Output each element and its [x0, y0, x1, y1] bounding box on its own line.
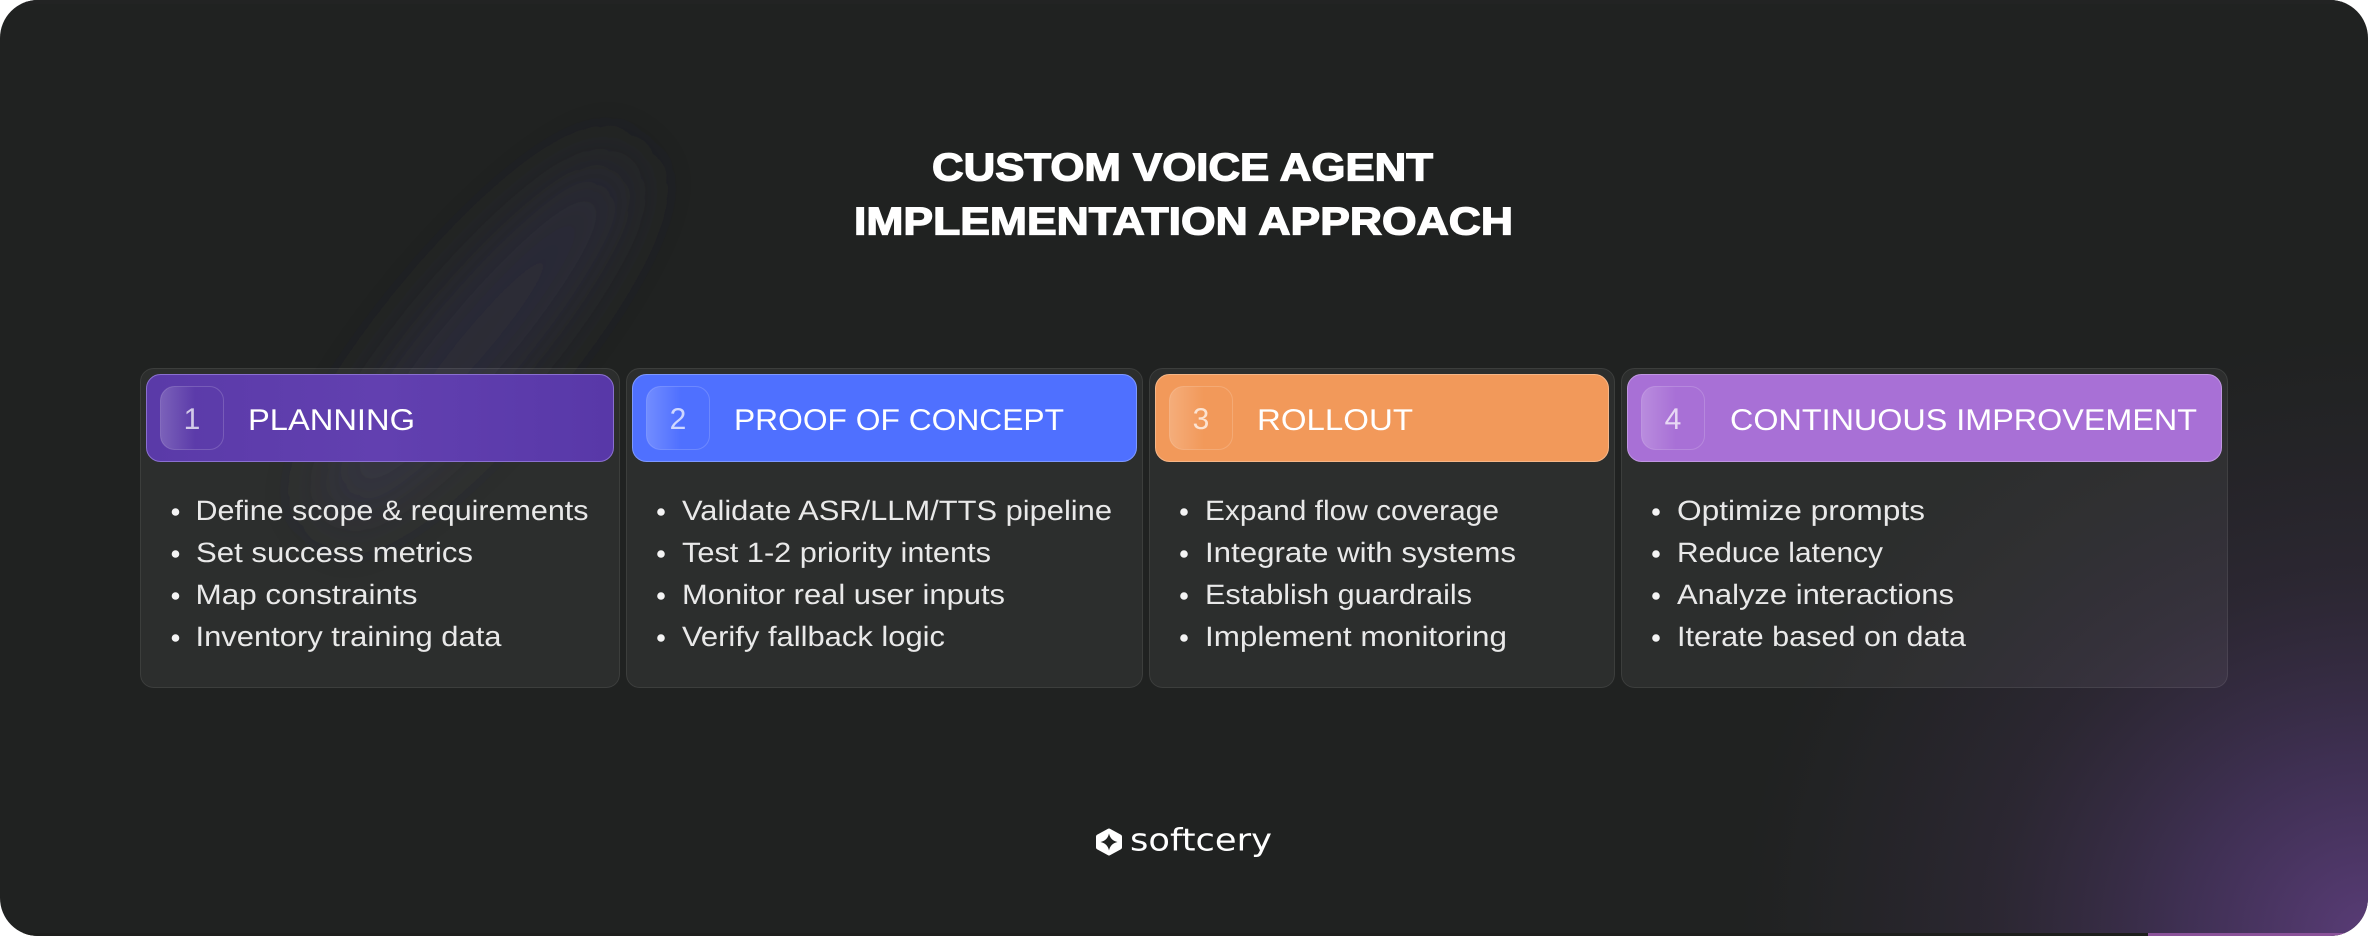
list: continuous improvement tasks: Analyze interactions: [1677, 579, 1954, 610]
header: planning: [146, 374, 614, 462]
list: proof of concept tasks: Validate ASR/LLM/TTS pipeline: [682, 495, 1112, 526]
list: continuous improvement tasks: Reduce latency: [1677, 537, 1883, 568]
heading: proof of concept: PROOF OF CONCEPT: [734, 404, 1064, 437]
list: proof of concept tasks: [657, 495, 1112, 652]
list: planning tasks: Inventory training data: [196, 621, 502, 652]
list: proof of concept tasks: Monitor real user inputs: [682, 579, 1005, 610]
panel: proof of concept: [626, 368, 1142, 688]
badge: number 2: [646, 386, 710, 450]
list: continuous improvement tasks: [1652, 495, 1966, 652]
title: CUSTOM VOICE AGENT: [932, 146, 1433, 190]
badge: number 3: 3: [1193, 403, 1209, 436]
heading: rollout: ROLLOUT: [1257, 404, 1413, 437]
list: continuous improvement tasks: Iterate based on data: [1677, 621, 1966, 652]
header: continuous improvement: [1628, 374, 2222, 462]
title: [854, 146, 1513, 244]
list: proof of concept tasks: Test 1-2 priority intents: [682, 537, 991, 568]
list: rollout tasks: Expand flow coverage: [1205, 495, 1499, 526]
badge: number 2: 2: [670, 403, 686, 436]
panel: continuous improvement: [1622, 368, 2228, 688]
panel: planning: [140, 368, 620, 688]
header: rollout: [1156, 374, 1608, 462]
heading: planning: PLANNING: [248, 404, 415, 437]
heading: continuous improvement: CONTINUOUS IMPROVEMENT: [1730, 404, 2197, 437]
list: planning tasks: Map constraints: [196, 579, 418, 610]
badge: number 3: [1170, 386, 1232, 450]
list: planning tasks: Define scope & requirements: [196, 495, 588, 526]
list: planning tasks: [172, 495, 588, 652]
logo: softcery: [1098, 822, 1272, 858]
badge: number 4: 4: [1665, 403, 1681, 436]
wordmark: softcery: softcery: [1130, 822, 1272, 858]
badge: number 1: [160, 386, 224, 450]
badge: number 1: 1: [184, 403, 200, 436]
header: proof of concept: [632, 374, 1136, 462]
list: continuous improvement tasks: Optimize prompts: [1677, 495, 1925, 526]
icon: softcery hexagon star: [1098, 830, 1120, 854]
list: proof of concept tasks: Verify fallback logic: [682, 621, 945, 652]
panel: rollout: [1150, 368, 1614, 688]
list: rollout tasks: Establish guardrails: [1205, 579, 1472, 610]
list: rollout tasks: Integrate with systems: [1205, 537, 1516, 568]
list: planning tasks: Set success metrics: [196, 537, 473, 568]
badge: number 4: [1642, 386, 1704, 450]
title: IMPLEMENTATION APPROACH: [854, 200, 1513, 244]
list: rollout tasks: [1180, 495, 1516, 652]
list: rollout tasks: Implement monitoring: [1205, 621, 1507, 652]
